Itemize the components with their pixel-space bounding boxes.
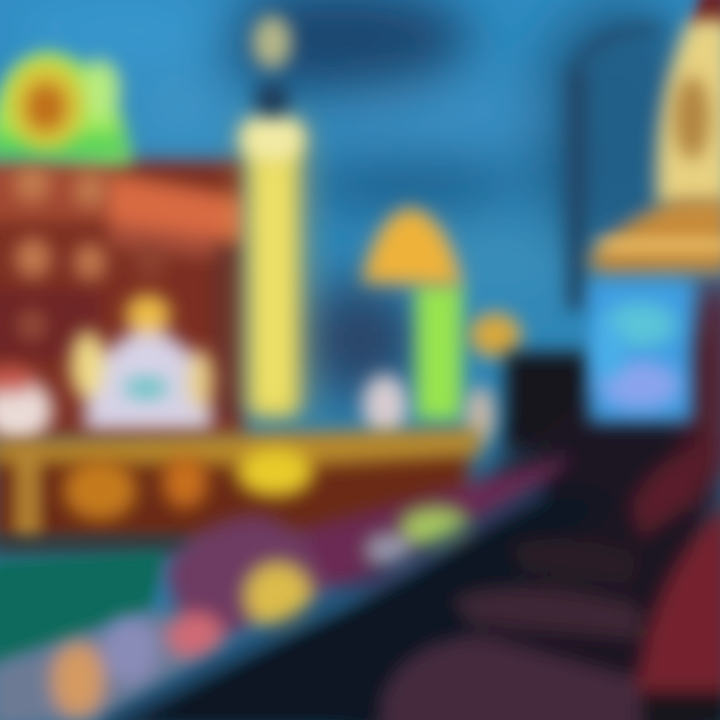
blue video sign — [590, 280, 692, 422]
red hotel building — [0, 160, 245, 440]
green dome with yellow medallion — [0, 52, 132, 165]
dark diagonal railing — [95, 490, 610, 720]
colorful floor and chips — [0, 455, 575, 720]
right side seating backdrop — [340, 280, 720, 720]
green gaming table — [0, 552, 165, 668]
tall yellow tower — [240, 16, 308, 418]
theater seats — [380, 445, 720, 720]
golden casino base band — [0, 428, 480, 555]
right golden tower and canopy — [586, 0, 720, 272]
building windows — [14, 166, 164, 340]
ornate white and blue casino facade — [0, 295, 213, 442]
dark lamp post silhouette — [566, 30, 660, 310]
dark building block — [505, 352, 590, 452]
orange dome with green column — [362, 208, 521, 443]
